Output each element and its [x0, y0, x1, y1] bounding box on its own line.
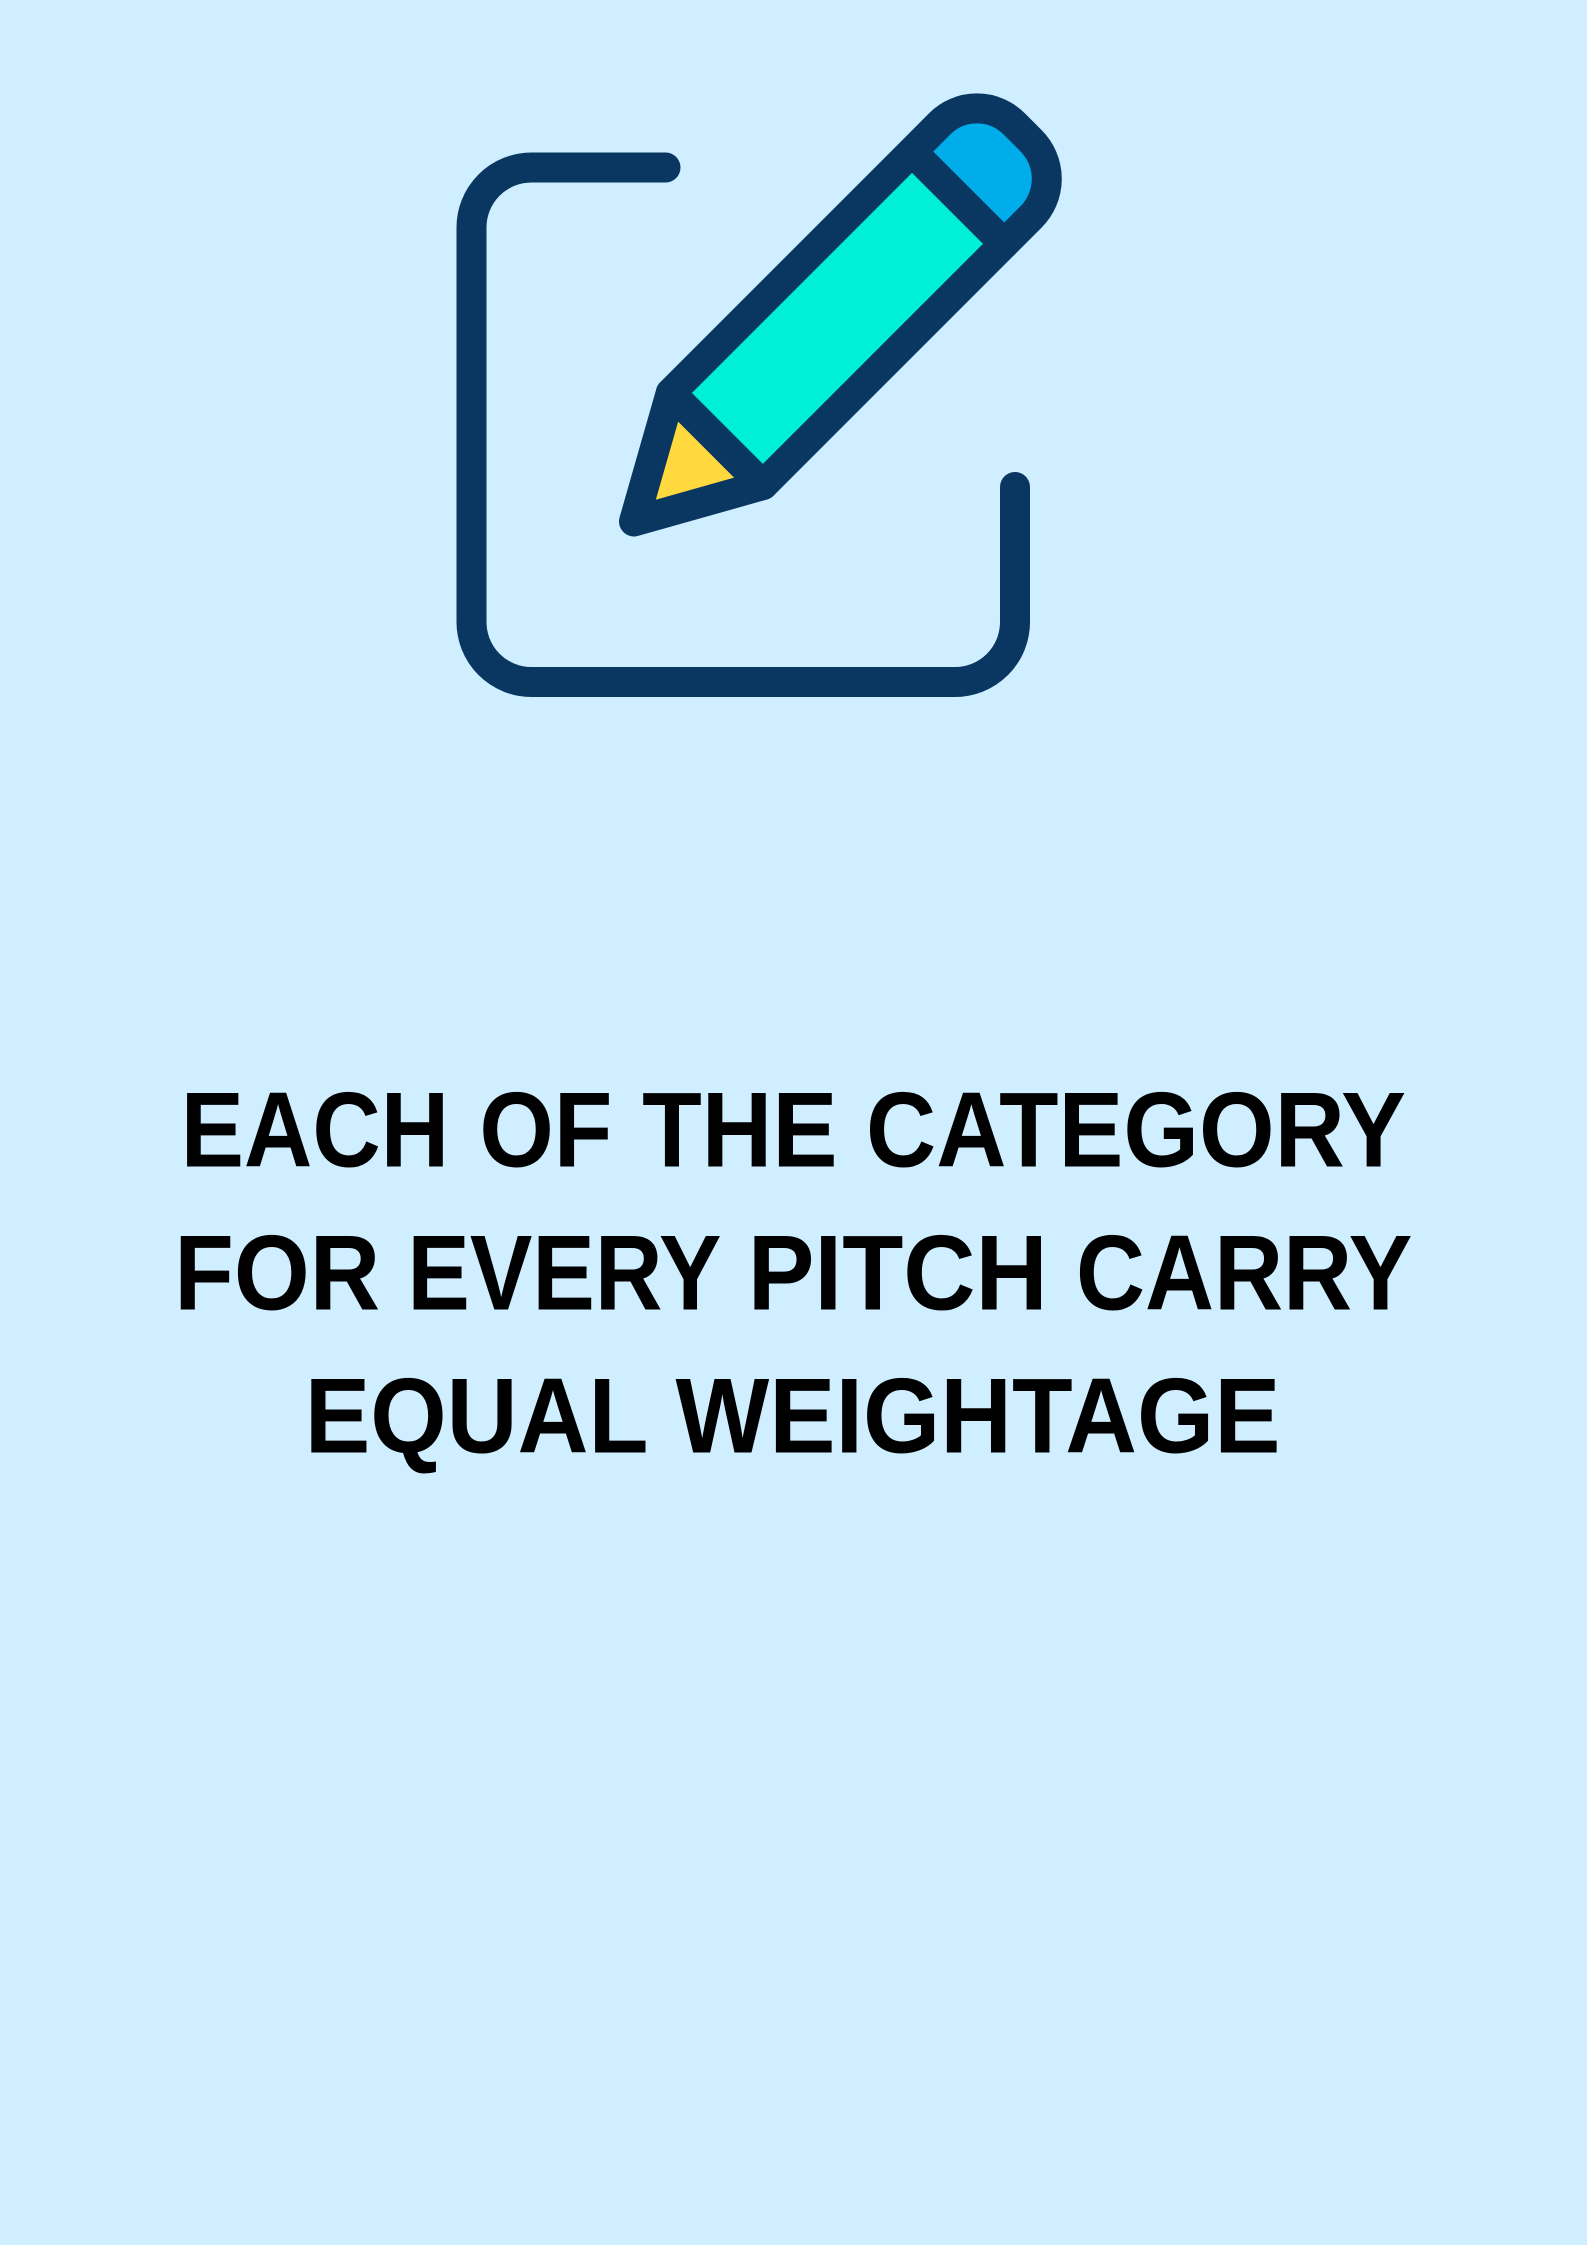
heading text: CATEGORY [866, 1070, 1406, 1190]
icon part: pencil tip [634, 393, 763, 522]
heading text: EVERY [407, 1213, 722, 1333]
heading text: PITCH [748, 1213, 1048, 1333]
heading text: FOR [174, 1213, 380, 1333]
icon: pencil editing a square frame [472, 108, 1047, 682]
icon part: pencil body [671, 152, 1004, 485]
heading text: OF [479, 1070, 612, 1190]
heading text: THE [642, 1070, 838, 1190]
icon part: open square frame [472, 168, 1015, 682]
heading text: EACH [181, 1070, 449, 1190]
icon part: pencil eraser [912, 108, 1047, 244]
heading text [174, 1070, 1412, 1476]
heading text: WEIGHTAGE [676, 1356, 1280, 1476]
heading text: CARRY [1076, 1213, 1412, 1333]
heading text: EQUAL [305, 1356, 648, 1476]
